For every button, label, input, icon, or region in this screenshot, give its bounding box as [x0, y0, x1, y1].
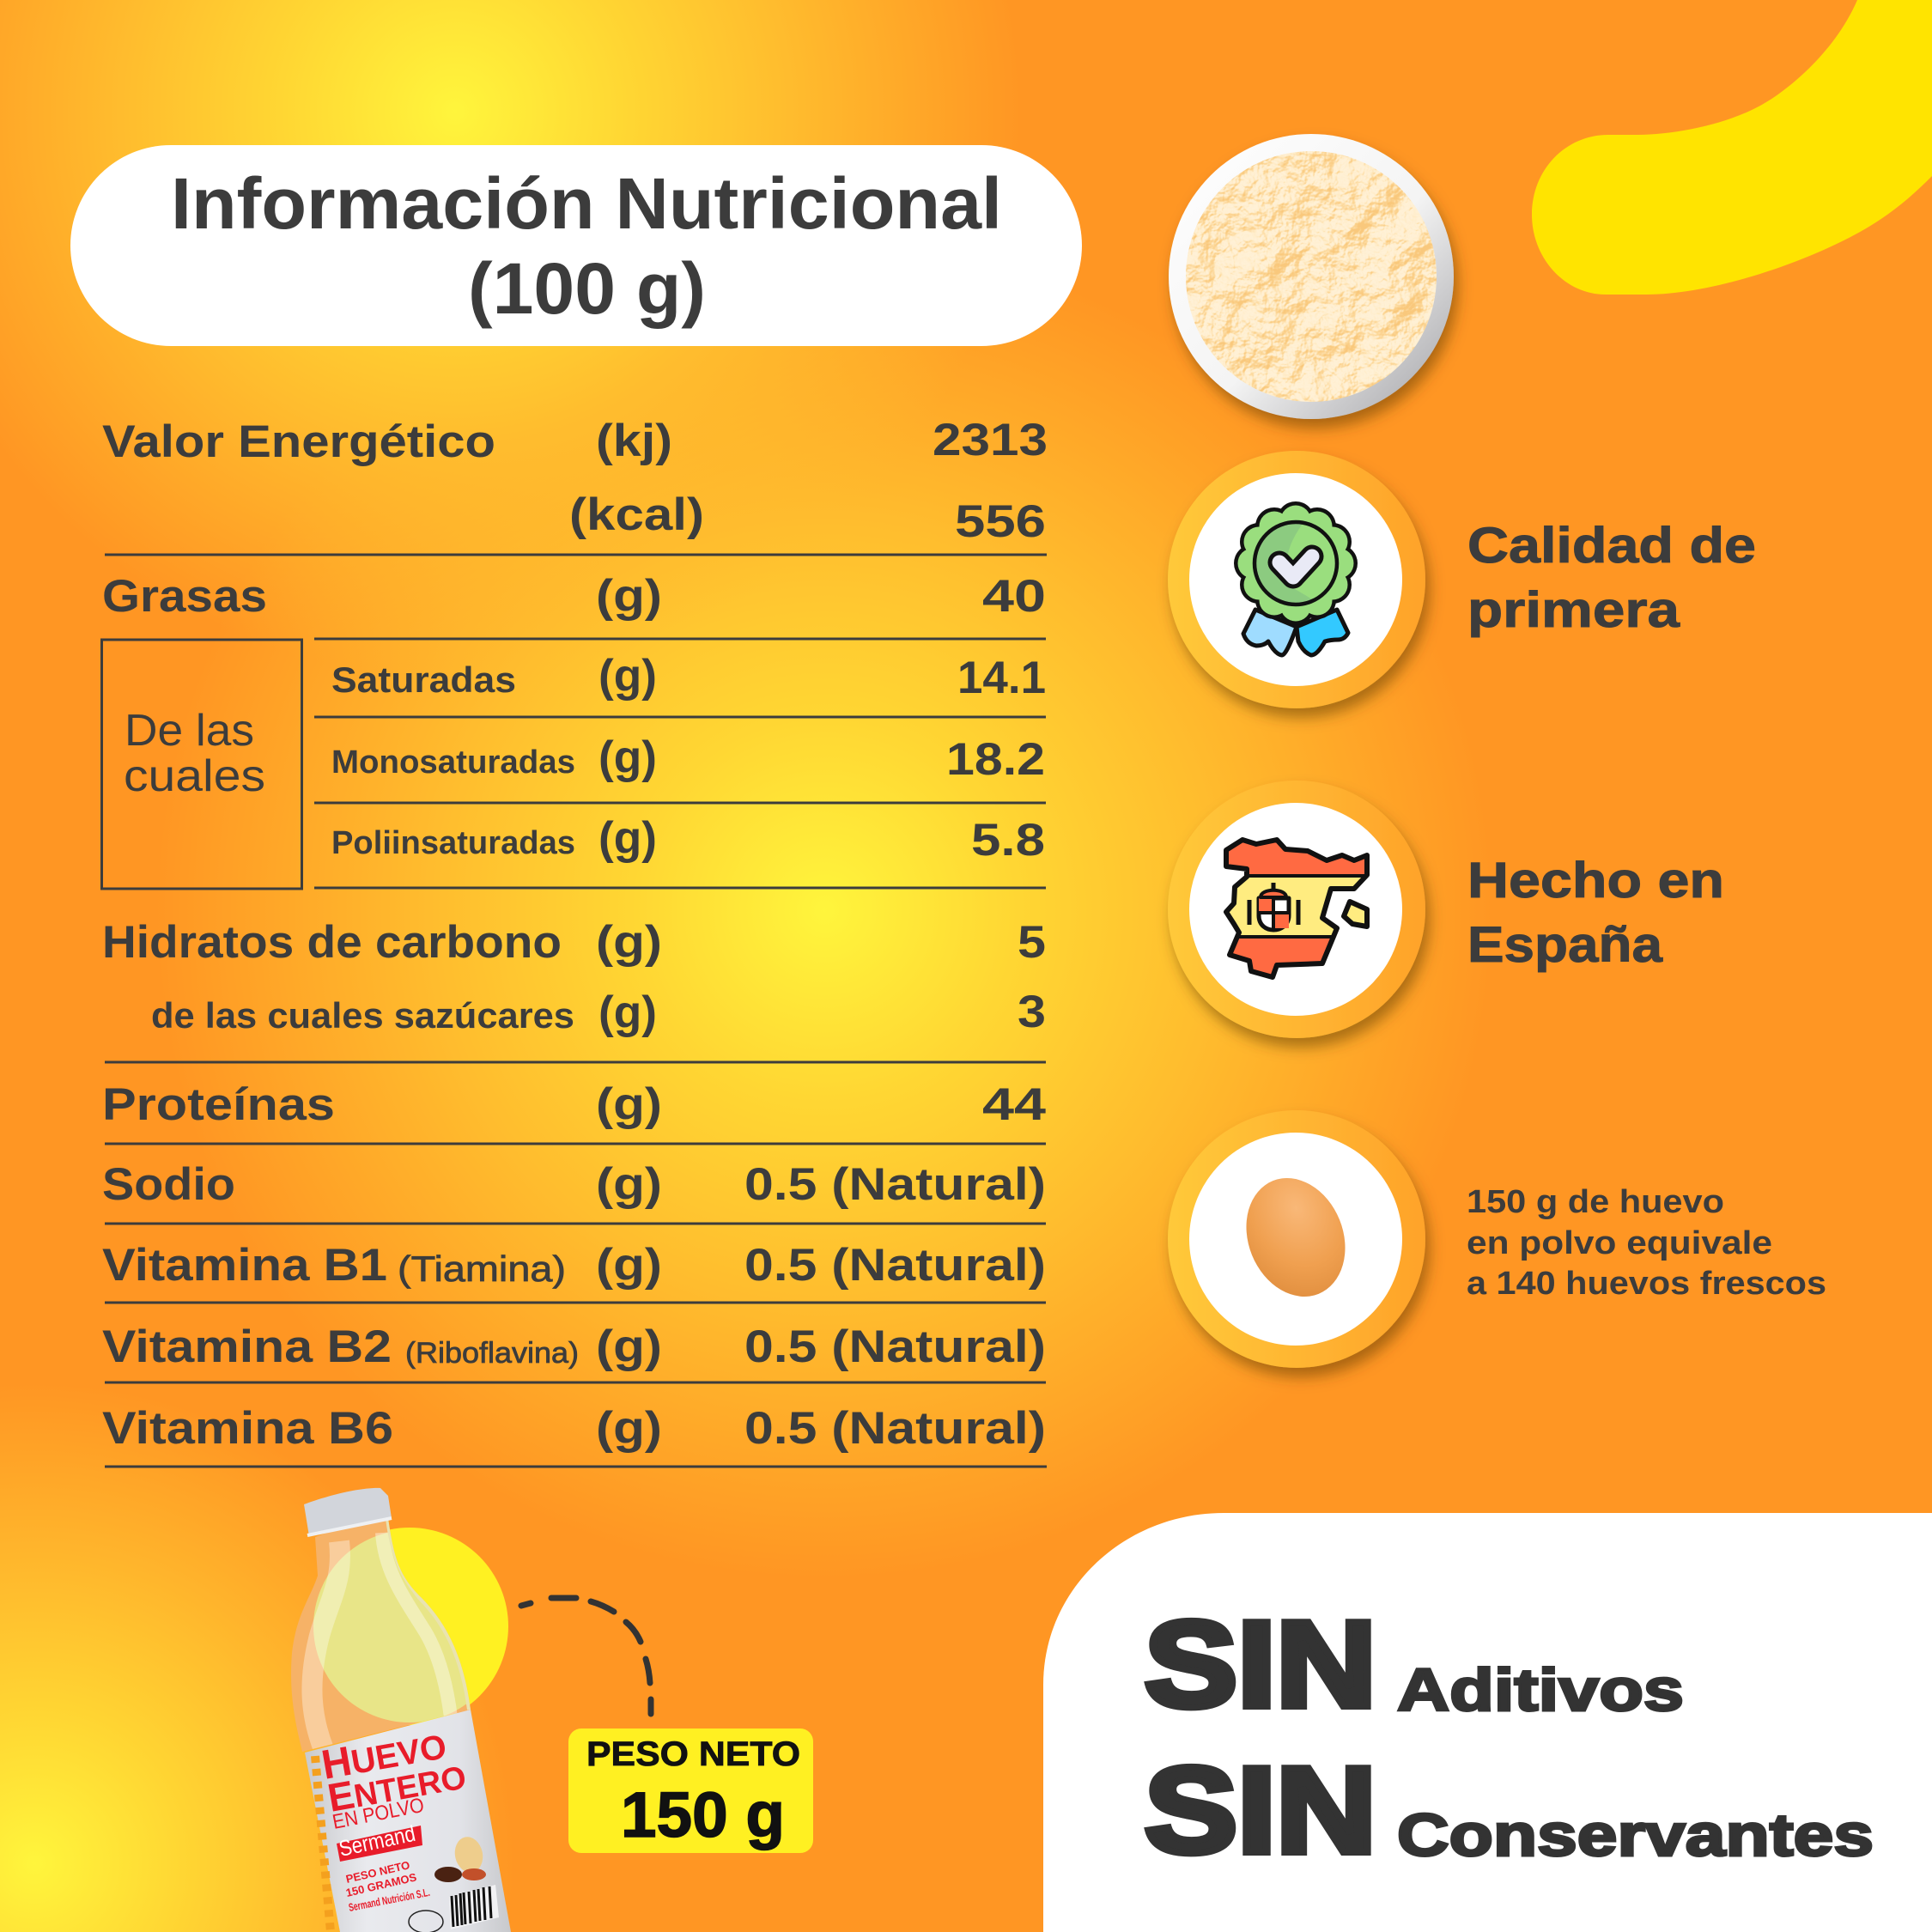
- bottle label: [305, 1710, 511, 1932]
- row: valor energético: (kj): [596, 416, 672, 466]
- row: vitamina b1: (g): [596, 1240, 662, 1291]
- row: proteínas: [102, 1079, 1047, 1130]
- row: monosaturadas: (g): [598, 732, 657, 783]
- bottle body: [291, 1511, 471, 1752]
- title text: (100 g): [468, 248, 706, 329]
- row: poliinsaturadas: 5.8: [971, 815, 1045, 866]
- row: grasas: 40: [982, 571, 1046, 622]
- row: vitamina b1: 0.5 (Natural): [744, 1240, 1046, 1291]
- row: vitamina b6: [102, 1403, 1046, 1454]
- icon: quality rosette: [1234, 501, 1358, 655]
- row: poliinsaturadas: Poliinsaturadas: [331, 825, 575, 861]
- row: valor energético: [102, 415, 1048, 547]
- label text: HUEVO: [319, 1722, 450, 1789]
- label: egg equivalence: 150 g de huevo: [1467, 1184, 1724, 1220]
- row: monosaturadas: 18.2: [946, 734, 1045, 785]
- row: vitamina b2: Vitamina B2: [102, 1321, 392, 1372]
- sin aditivos: SIN: [1145, 1596, 1376, 1733]
- bottle cap: [304, 1488, 392, 1536]
- label text: ENTERO: [325, 1753, 469, 1820]
- row: poliinsaturadas: (g): [598, 813, 657, 864]
- box: de las cuales: cuales: [124, 751, 265, 801]
- row: vitamina b1: (Tiamina): [398, 1249, 566, 1289]
- row: grasas: (g): [596, 571, 662, 622]
- row: grasas: [102, 571, 1046, 622]
- row: poliinsaturadas: [331, 813, 1045, 866]
- label text: EN POLVO: [331, 1794, 426, 1834]
- stamp: [409, 1911, 443, 1932]
- label: calidad de primera: Calidad de: [1467, 518, 1756, 574]
- row: sodio: [102, 1159, 1046, 1210]
- label text: Sermand Nutrición S.L.: [348, 1886, 431, 1914]
- row: vitamina b6: (g): [596, 1403, 662, 1454]
- box: de las cuales: [101, 640, 302, 889]
- row: sodio: 0.5 (Natural): [744, 1159, 1046, 1210]
- label text: 150 GRAMOS: [344, 1870, 418, 1899]
- label: calidad de primera: primera: [1467, 582, 1680, 638]
- row: saturadas: Saturadas: [331, 659, 516, 700]
- badge: calidad de primera: [1168, 451, 1756, 708]
- box: de las cuales: De las: [125, 706, 254, 756]
- product bottle: [291, 1488, 511, 1932]
- row: valor energético: Valor Energético: [102, 416, 495, 467]
- label: hecho en españa: [1467, 853, 1724, 973]
- sin conservantes: [1145, 1742, 1874, 1879]
- badge: hecho en españa: [1168, 781, 1724, 1038]
- sin conservantes: Conservantes: [1397, 1801, 1874, 1868]
- row: vitamina b1: Vitamina B1: [102, 1240, 387, 1291]
- dashed arrow: [521, 1598, 651, 1714]
- sin aditivos: Aditivos: [1397, 1656, 1684, 1723]
- row: valor energético: 2313: [933, 415, 1048, 465]
- label text: [319, 1722, 469, 1914]
- title text: [171, 163, 1002, 329]
- row: azúcares: 3: [1018, 987, 1046, 1037]
- row: hidratos de carbono: 5: [1018, 917, 1046, 968]
- label: egg equivalence: [1467, 1184, 1826, 1302]
- barcode: [449, 1885, 499, 1929]
- row: vitamina b2: [102, 1321, 1046, 1372]
- row: hidratos de carbono: (g): [596, 917, 662, 968]
- row: sodio: (g): [596, 1159, 662, 1210]
- row: proteínas: (g): [596, 1079, 662, 1130]
- yellow circle behind bottle: [311, 1528, 508, 1725]
- row: sodio: Sodio: [102, 1159, 235, 1210]
- row: monosaturadas: Monosaturadas: [331, 744, 575, 781]
- title text: Información Nutricional: [171, 163, 1002, 244]
- label: hecho en españa: Hecho en: [1467, 853, 1724, 908]
- badge: egg equivalence: [1168, 1110, 1826, 1368]
- label: egg equivalence: a 140 huevos frescos: [1467, 1266, 1826, 1302]
- row: azúcares: [151, 987, 1046, 1038]
- row: azúcares: (g): [598, 987, 657, 1038]
- row: vitamina b6: Vitamina B6: [102, 1403, 393, 1454]
- row: azúcares: de las cuales sazúcares: [151, 995, 574, 1036]
- row: grasas: Grasas: [102, 571, 267, 622]
- row: vitamina b2: 0.5 (Natural): [744, 1321, 1046, 1372]
- label: hecho en españa: España: [1467, 917, 1663, 973]
- row: proteínas: 44: [982, 1079, 1047, 1130]
- label text: PESO NETO: [344, 1858, 411, 1886]
- label: egg equivalence: en polvo equivale: [1467, 1225, 1772, 1261]
- label: calidad de primera: [1467, 518, 1756, 638]
- row: vitamina b1: [102, 1240, 1046, 1291]
- row: valor energético: (kcal): [569, 489, 704, 540]
- net weight tag: 150 g: [621, 1779, 785, 1850]
- photo: egg powder in white plate: [1169, 134, 1454, 419]
- flan picture: [434, 1834, 486, 1882]
- row: vitamina b6: 0.5 (Natural): [744, 1403, 1046, 1454]
- row: saturadas: (g): [598, 651, 657, 702]
- row: vitamina b2: (Riboflavina): [405, 1337, 579, 1370]
- sin aditivos: [1145, 1596, 1684, 1733]
- icon: egg: [1229, 1163, 1363, 1311]
- row: vitamina b2: (g): [596, 1321, 662, 1372]
- label text: Sermand: [337, 1820, 417, 1862]
- row: proteínas: Proteínas: [102, 1079, 335, 1130]
- title pill: [70, 145, 1082, 346]
- row: valor energético: 556: [955, 496, 1046, 547]
- net weight tag: [568, 1728, 813, 1853]
- decorative yellow blob top right: [1532, 0, 1932, 295]
- icon: map of spain with flag: [1223, 837, 1370, 980]
- row: hidratos de carbono: Hidratos de carbono: [102, 917, 562, 968]
- row: hidratos de carbono: [102, 917, 1046, 968]
- row: saturadas: [331, 651, 1046, 703]
- sin conservantes: SIN: [1145, 1742, 1376, 1879]
- nutrition table: [101, 415, 1048, 1467]
- row: saturadas: 14.1: [957, 653, 1046, 703]
- net weight tag: PESO NETO: [586, 1735, 800, 1773]
- row: monosaturadas: [331, 732, 1045, 785]
- white panel bottom right: [1043, 1513, 1932, 1932]
